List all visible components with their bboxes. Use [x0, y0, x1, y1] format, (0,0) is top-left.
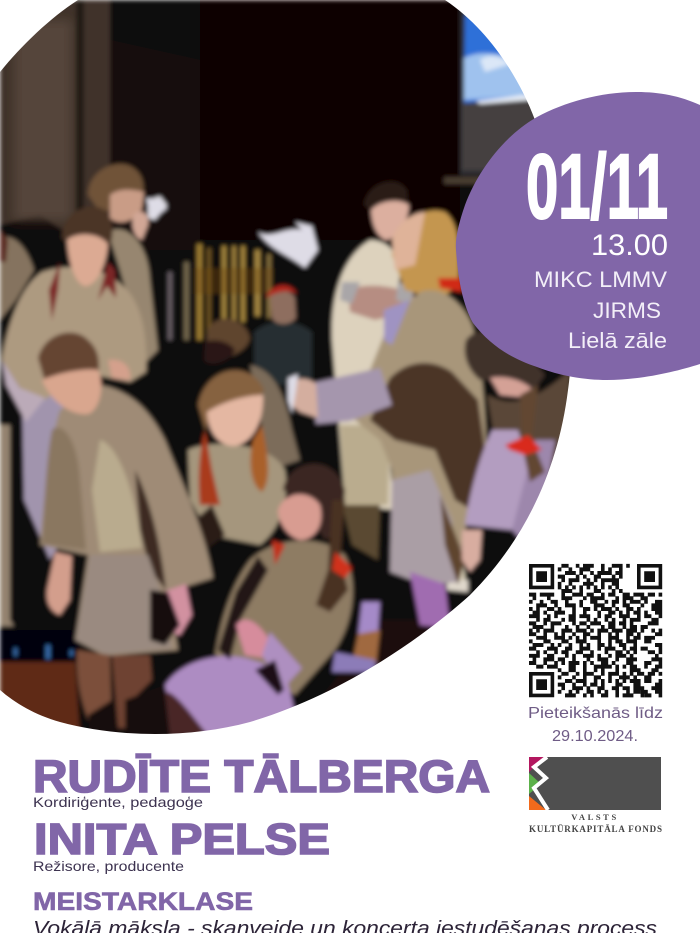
- registration deadline: [528, 705, 663, 745]
- foreground bent girl: [38, 333, 213, 735]
- girl with red-ribbon braids: [2, 207, 146, 560]
- time: 13.00: [591, 229, 668, 262]
- registration deadline: Pieteikšanās līdz: [528, 705, 663, 722]
- girl bent at right: [462, 331, 570, 572]
- organ pipes: [168, 244, 273, 340]
- girl at left edge: [0, 237, 34, 320]
- QR code: [529, 564, 662, 697]
- floor: [0, 660, 80, 740]
- blonde girl with back to viewer: [288, 210, 488, 672]
- photo: singers on stage in a rounded blob: [0, 0, 570, 734]
- logo: Valsts Kultūrkapitāla fonds: VALSTS: [571, 812, 619, 822]
- heading: Rudīte Tālberga: RUDĪTE TĀLBERGA: [33, 751, 490, 802]
- seated girl in front: [165, 464, 353, 735]
- seated dark-haired figure: [205, 319, 250, 359]
- logo: Valsts Kultūrkapitāla fonds: KULTŪRKAPITĀLA FONDS: [529, 824, 662, 834]
- role: Režisore, producente: Režisore, producente: [33, 858, 184, 874]
- heading: Inita Pelse: INITA PELSE: [34, 815, 330, 864]
- heading: Meistarklase: MEISTARKLASE: [33, 888, 253, 916]
- logo: Valsts Kultūrkapitāla fonds: [529, 757, 662, 834]
- date and venue badge: [456, 92, 700, 380]
- man in santa hat: [254, 322, 312, 385]
- role: Kordiriģente, pedagoģe: Kordiriģente, pedagoģe: [33, 794, 203, 810]
- girl at the back: [88, 164, 167, 362]
- venue line 1: MIKC LMMV: [534, 267, 667, 292]
- girl with white dress: [332, 181, 468, 592]
- girl at centre with braids: [188, 370, 286, 550]
- venue line 2: JIRMS: [593, 298, 661, 323]
- registration deadline: 29.10.2024.: [552, 728, 638, 745]
- venue line 3: Lielā zāle: [568, 328, 667, 353]
- paper snowflakes: [146, 198, 318, 414]
